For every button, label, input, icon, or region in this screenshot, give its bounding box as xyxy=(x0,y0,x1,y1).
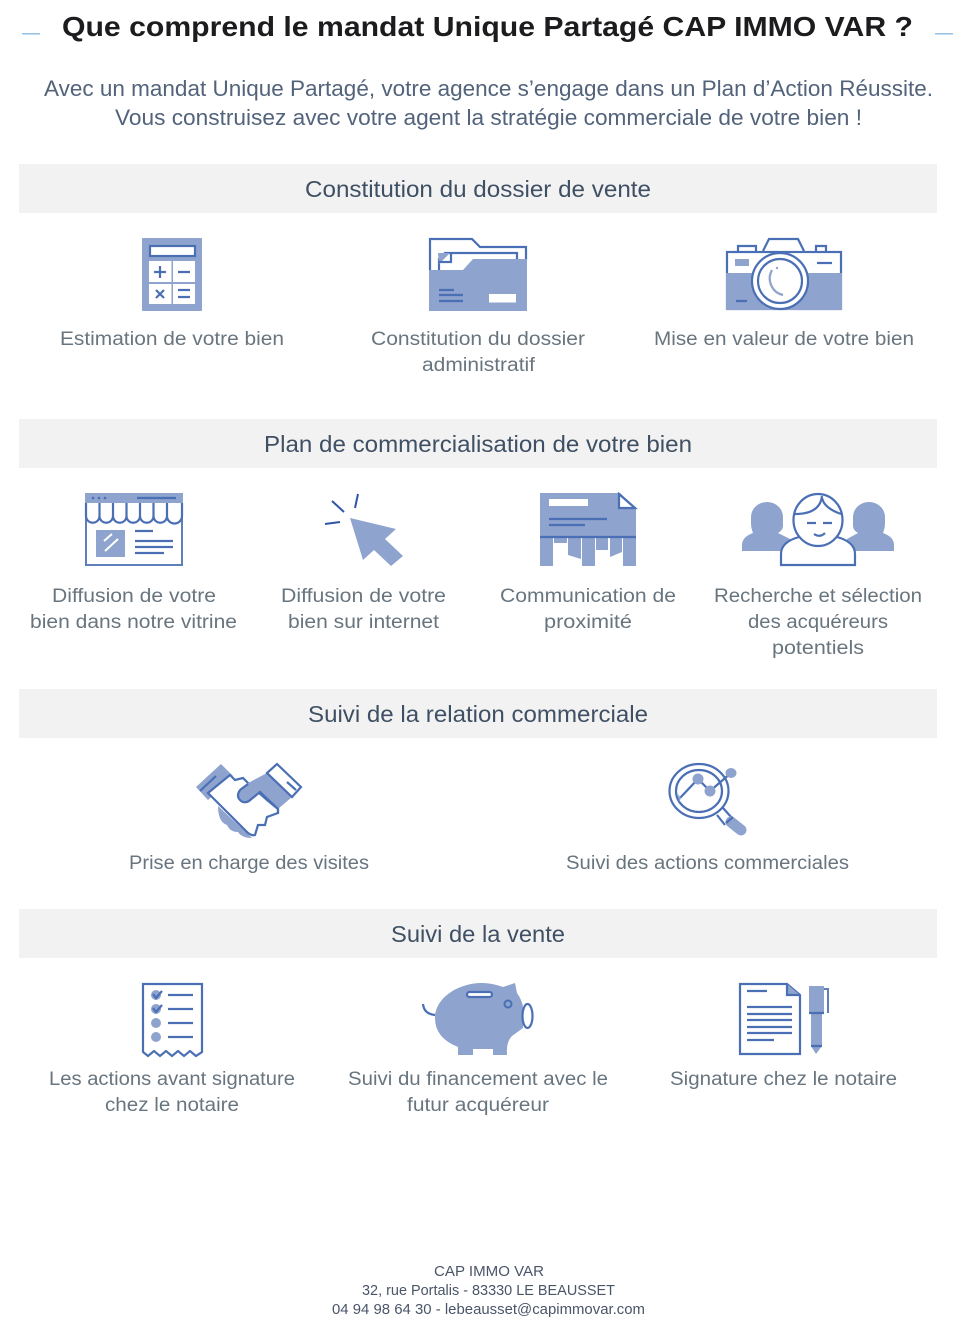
footer: CAP IMMO VAR xyxy=(434,1264,544,1280)
panel: plan de commercialisation xyxy=(19,419,937,659)
label: acquéreurs: des acquéreurs xyxy=(748,612,888,633)
icon: folder xyxy=(429,239,527,311)
icon: storefront xyxy=(85,493,183,565)
label: proximité: Communication de xyxy=(500,586,676,607)
label: acquéreurs: potentiels xyxy=(772,638,864,659)
title: Que comprend le mandat Unique Partagé CAP IMMO VAR ? xyxy=(62,11,913,42)
label: acquéreurs: Recherche et sélection xyxy=(714,586,922,607)
icon: people xyxy=(742,494,894,565)
label: financement: Suivi du financement avec le xyxy=(348,1069,608,1090)
heading band xyxy=(19,164,937,213)
panel: constitution du dossier de vente xyxy=(19,164,937,376)
icon: document and pen xyxy=(740,984,828,1054)
label: vitrine: Diffusion de votre xyxy=(52,586,216,607)
icon: checklist xyxy=(143,984,202,1056)
label: financement: futur acquéreur xyxy=(407,1095,550,1116)
icon: handshake xyxy=(196,764,301,838)
label: dossier administratif xyxy=(371,329,586,376)
label: signature: Signature chez le notaire xyxy=(670,1069,897,1090)
icon: calculator xyxy=(142,238,202,311)
label: dossier administratif: Constitution du dossier xyxy=(371,329,586,350)
label: internet xyxy=(281,586,446,633)
label: actions avant signature: chez le notaire xyxy=(105,1095,239,1116)
heading band: Plan de commercialisation de votre bien xyxy=(264,431,692,457)
label: vitrine xyxy=(30,586,237,633)
footer xyxy=(332,1264,645,1318)
label: internet: Diffusion de votre xyxy=(281,586,446,607)
icon: flyer xyxy=(540,493,636,566)
label: mise en valeur: Mise en valeur de votre bien xyxy=(654,329,914,350)
label: actions commerciales: Suivi des actions commerciales xyxy=(566,853,849,874)
label: acquéreurs xyxy=(714,586,922,659)
heading band: Suivi de la relation commerciale xyxy=(308,701,648,727)
footer: 04 94 98 64 30 - lebeausset@capimmovar.com xyxy=(332,1302,645,1318)
label: financement xyxy=(348,1069,608,1116)
icon: magnifier xyxy=(670,764,741,830)
label: vitrine: bien dans notre vitrine xyxy=(30,612,237,633)
intro text xyxy=(44,76,933,130)
icon: cursor click xyxy=(325,494,403,566)
intro text: Vous construisez avec votre agent la stratégie commerciale de votre bien ! xyxy=(115,105,862,130)
label: dossier administratif: administratif xyxy=(422,355,536,376)
label: visites: Prise en charge des visites xyxy=(129,853,369,874)
label: proximité: proximité xyxy=(544,612,632,633)
heading band xyxy=(19,909,937,958)
label: actions avant signature xyxy=(49,1069,295,1116)
heading band xyxy=(19,689,937,738)
label: estimation: Estimation de votre bien xyxy=(60,329,284,350)
heading band: Suivi de la vente xyxy=(391,921,565,947)
icon: piggy bank xyxy=(423,983,532,1055)
icon: camera xyxy=(726,239,842,310)
panel: suivi de la vente xyxy=(19,909,937,1116)
label: proximité xyxy=(500,586,676,633)
panel: suivi de la relation commerciale xyxy=(19,689,937,874)
footer: 32, rue Portalis - 83330 LE BEAUSSET xyxy=(362,1283,615,1299)
heading band xyxy=(19,419,937,468)
label: actions avant signature: Les actions avant signature xyxy=(49,1069,295,1090)
intro text: Avec un mandat Unique Partagé, votre agence s’engage dans un Plan d’Action Réussite. xyxy=(44,76,933,101)
label: internet: bien sur internet xyxy=(288,612,440,633)
heading band: Constitution du dossier de vente xyxy=(305,176,651,202)
